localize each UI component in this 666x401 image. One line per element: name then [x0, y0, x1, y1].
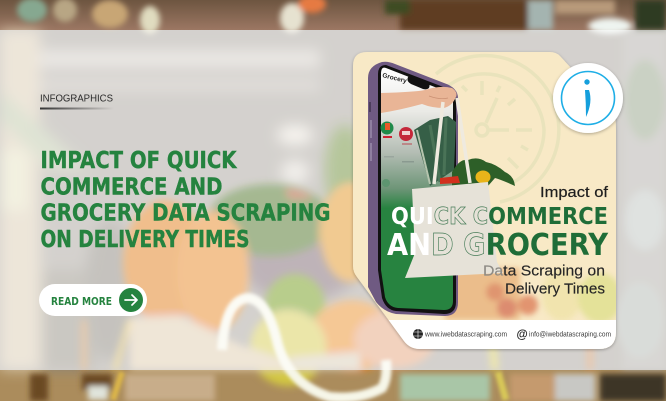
card title text: Delivery Times [505, 280, 605, 298]
card title text: QUICK COMMERCE [391, 204, 608, 230]
main heading: ON DELIVERY TIMES [40, 227, 250, 253]
store icons [380, 122, 414, 187]
email contact [516, 329, 611, 341]
logo badge [553, 63, 623, 133]
website contact: www.iwebdatascraping.com [424, 332, 507, 338]
promo card [353, 52, 623, 349]
read more button: READ MORE [51, 296, 112, 308]
email contact: @ [516, 329, 528, 341]
footer strip [388, 320, 616, 349]
category label: infographics [40, 94, 114, 110]
faded produce in card [388, 265, 616, 349]
card title text [387, 185, 609, 298]
category label: infographics: INFOGRAPHICS [40, 94, 113, 104]
card title text: AND GROCERY [387, 228, 609, 263]
website contact [413, 329, 507, 339]
vegetables [414, 116, 515, 186]
tote bag [405, 98, 503, 278]
card title text: Impact of [540, 185, 609, 201]
phone mockup [368, 62, 458, 316]
phone notch [407, 76, 430, 89]
main heading: GROCERY DATA SCRAPING [40, 201, 330, 227]
main heading [40, 148, 330, 253]
hand holding bag [381, 87, 456, 113]
card background [353, 52, 616, 349]
email contact: info@iwebdatascraping.com [529, 332, 611, 338]
app title: Grocery [382, 72, 408, 85]
card title text: Data Scraping on [483, 262, 605, 280]
main heading: COMMERCE AND [40, 174, 222, 200]
read more button [39, 284, 147, 316]
clock watermark [436, 56, 559, 202]
main heading: IMPACT OF QUICK [40, 148, 238, 174]
